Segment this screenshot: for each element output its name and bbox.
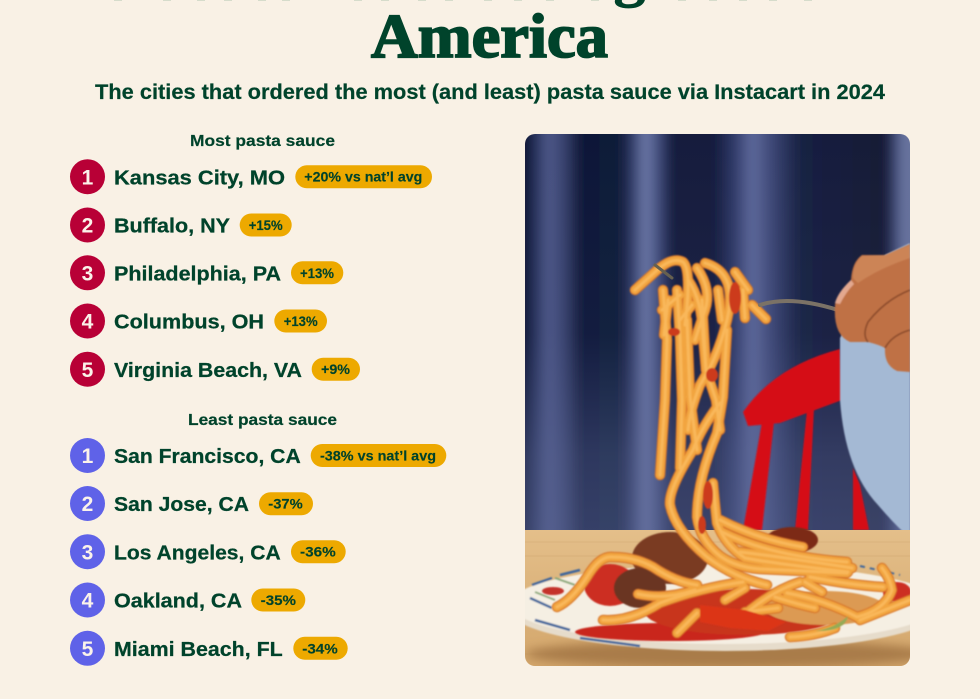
row: Kansas City: Kansas City, MO <box>114 167 285 189</box>
row: Miami Beach <box>70 631 348 666</box>
hand <box>835 244 910 372</box>
row: San Jose: San Jose, CA <box>114 494 249 516</box>
row: Miami Beach: Miami Beach, FL <box>114 639 283 661</box>
row: Columbus: Columbus, OH <box>114 312 264 334</box>
panel: least pasta sauce <box>70 412 446 666</box>
row: Kansas City <box>70 159 432 194</box>
row: Oakland: Oakland, CA <box>114 591 242 613</box>
tomato sauce on strands <box>668 282 741 534</box>
row: Oakland: 4 <box>82 590 94 613</box>
row: San Francisco <box>70 438 446 473</box>
row: Columbus: +13% <box>284 314 318 329</box>
spaghetti <box>557 260 910 637</box>
title <box>114 0 812 71</box>
row: Buffalo: 2 <box>82 215 93 238</box>
row: Virginia Beach <box>70 352 360 387</box>
sleeve <box>840 243 910 538</box>
sauce <box>542 564 911 641</box>
row: Los Angeles: 3 <box>82 541 93 564</box>
row: San Jose <box>70 486 313 521</box>
meatballs <box>614 527 818 608</box>
row: Columbus: 4 <box>82 311 94 334</box>
red chair <box>743 349 869 530</box>
row: Buffalo: +15% <box>249 218 283 233</box>
row: Kansas City: 1 <box>82 166 94 189</box>
row: San Jose: -37% <box>268 497 303 512</box>
row: Buffalo: Buffalo, NY <box>114 216 231 238</box>
row: Miami Beach: -34% <box>302 641 338 656</box>
row: San Jose: 2 <box>82 493 93 516</box>
row: Oakland: -35% <box>261 593 296 608</box>
plate <box>525 564 910 652</box>
heading: most pasta sauce: Most pasta sauce <box>190 133 335 150</box>
row: Virginia Beach: 5 <box>82 359 94 382</box>
row: Virginia Beach: +9% <box>321 362 350 377</box>
basil leaf <box>815 616 848 631</box>
panel: most pasta sauce <box>70 133 432 387</box>
table <box>525 530 910 666</box>
title second line: America <box>371 3 608 71</box>
curtain <box>525 134 910 530</box>
plate shadow <box>525 640 910 666</box>
row: Los Angeles: -36% <box>300 545 336 560</box>
row: Buffalo <box>70 208 292 242</box>
row: Kansas City: +20% vs nat’l avg <box>304 170 422 185</box>
fork <box>655 265 838 310</box>
row: Los Angeles: Los Angeles, CA <box>114 542 281 564</box>
roasted red pepper <box>700 605 786 631</box>
row: Oakland <box>70 582 305 618</box>
row: Philadelphia: +13% <box>300 266 334 281</box>
row: Virginia Beach: Virginia Beach, VA <box>114 360 302 382</box>
row: Miami Beach: 5 <box>82 638 94 661</box>
row: Philadelphia: Philadelphia, PA <box>114 263 281 285</box>
row: Philadelphia <box>70 255 343 290</box>
row: San Francisco: 1 <box>82 445 94 468</box>
row: San Francisco: -38% vs nat’l avg <box>320 448 436 464</box>
row: San Francisco: San Francisco, CA <box>114 446 301 468</box>
row: Philadelphia: 3 <box>82 262 93 285</box>
subtitle: The cities that ordered the most (and least) pasta sauce via Instacart in 2024 <box>95 81 885 104</box>
row: Columbus <box>70 304 327 338</box>
row: Los Angeles <box>70 534 346 569</box>
heading: least pasta sauce: Least pasta sauce <box>188 412 337 429</box>
photo: forkful of spaghetti over a plate with meatballs <box>525 134 910 666</box>
